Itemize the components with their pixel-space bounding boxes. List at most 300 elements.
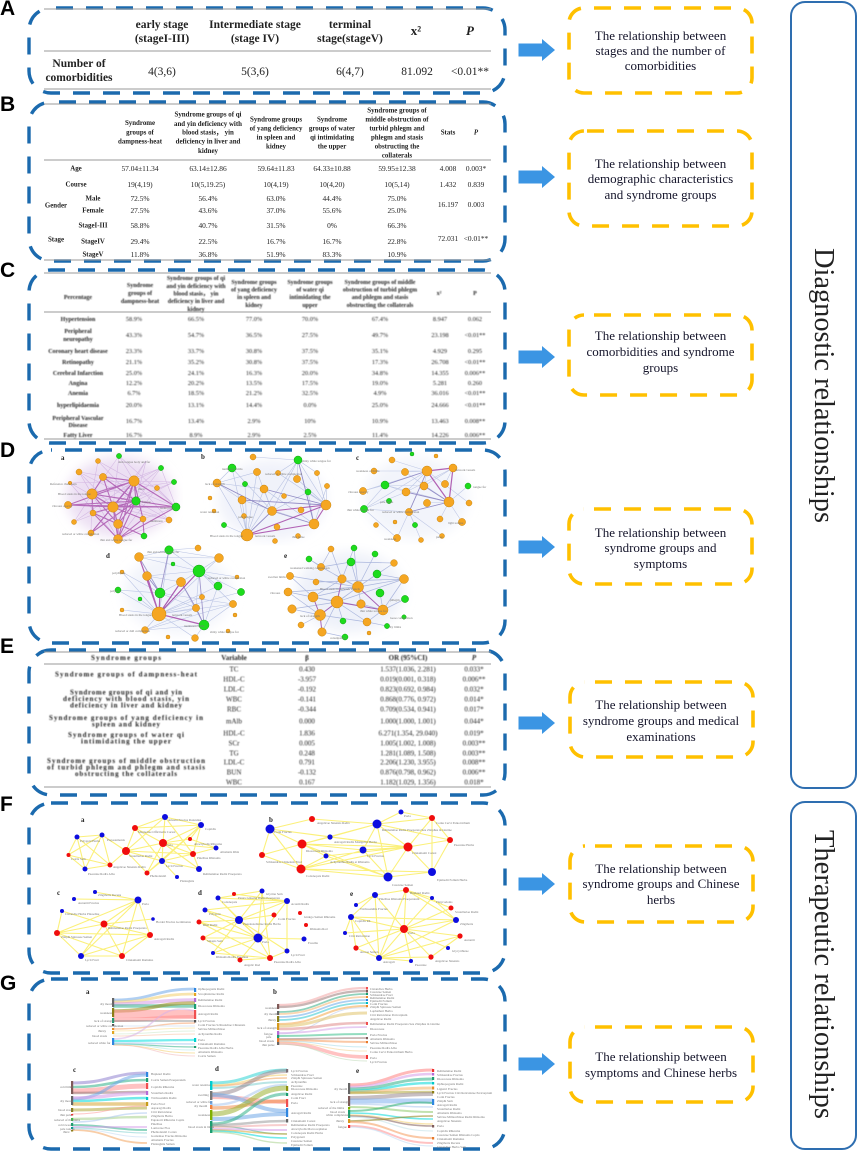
table B header: collaterals [382, 152, 412, 160]
sankey d: Cuscutae Semen [291, 1139, 313, 1143]
table C header: of yang deficiency [231, 288, 277, 294]
callout A: stages and comorbidities [569, 8, 752, 93]
sankey e: fatigue [338, 1125, 347, 1129]
table E values [223, 666, 486, 786]
sankey b: fatigue [264, 1032, 273, 1036]
network c: pulse [436, 535, 443, 539]
network d: Blood stasis in the tongue [119, 613, 153, 617]
table C rows: 14.4% [246, 402, 263, 409]
sankey b: thin pulse [262, 1043, 275, 1047]
arrow C [518, 346, 555, 368]
table A header: x² [411, 23, 421, 38]
table E values: 0.014* [464, 696, 484, 704]
sankey e: Angelicae Sinensis [437, 1119, 462, 1123]
sankey c: reduced of the limbs [54, 1118, 81, 1122]
table E header: Syndrome groups [91, 654, 161, 662]
network c: c [356, 454, 359, 462]
network e [268, 545, 413, 640]
network c: weakness [384, 537, 397, 541]
table E syndrome labels: spleen and kidney [92, 720, 160, 728]
table E header: OR (95%CI) [389, 654, 428, 662]
herb network a: Paeoniae Radix Alba [88, 872, 115, 876]
table C rows: 24.666 [431, 402, 449, 409]
table C header: kidney [187, 307, 205, 313]
herb network e: Glycyrrhizae [452, 949, 469, 953]
table E values: 0.868(0.776, 0.972) [380, 696, 436, 704]
sankey a: Coicis Semen [198, 1054, 216, 1058]
herb network d: Angelic Rad [244, 963, 260, 967]
herb network d: Panax Ginseng Radix Praeparata [238, 896, 280, 900]
herb network e: e [350, 890, 353, 898]
table A row: <0.01** [451, 66, 489, 78]
sankey d: weakness [198, 1113, 211, 1117]
herb network b: Astragali Radix Mongolici Herba [334, 840, 377, 844]
table C rows: 5.281 [433, 380, 447, 387]
sankey a: blood stasis [92, 1034, 108, 1038]
arrow B [518, 166, 555, 188]
table B header: Syndrome groups of [367, 108, 427, 114]
table B header: obstructing the [375, 144, 419, 150]
sankey d: Codonopsis Radix Herba [291, 1131, 324, 1135]
table E values: TC [230, 666, 239, 674]
table A row [45, 58, 489, 84]
network c: pale limbs [380, 500, 394, 504]
network b: lack of strength [205, 482, 225, 486]
sankey c: Scutellaria Radix [151, 1091, 173, 1095]
table B rows: 75.0% [387, 194, 407, 203]
sankey c: Trichosanthis Radix [151, 1096, 177, 1100]
sankey a: Ophiopogonis Radix [198, 987, 225, 991]
table C rows: 58.9% [126, 316, 143, 323]
network c: weakness of limbs [356, 469, 380, 473]
sankey c: Zingiberis Herba [151, 1114, 173, 1118]
sankey e: reduced of the limbs [318, 1106, 345, 1110]
sankey b: weakness [265, 1006, 278, 1010]
sankey e: Astragali Radix [437, 1103, 458, 1107]
table B header: middle obstruction of [365, 116, 429, 124]
table C rows: 2.9% [247, 432, 261, 439]
table B rows: 22.5% [198, 237, 218, 246]
table C rows: 54.7% [188, 332, 205, 339]
table A header: early stage [136, 19, 188, 31]
sankey d: Astragali Radix [291, 1111, 312, 1115]
sankey b: thirsty [268, 1018, 277, 1022]
herb network d: Rhizoma Radix Paeoniae [216, 955, 249, 959]
table E values: 0.019(0.001, 0.318) [380, 676, 436, 684]
table C rows: 4.929 [433, 348, 447, 355]
callout D: syndrome groups and symptoms: symptoms [634, 556, 687, 571]
table C rows: 6.7% [127, 390, 141, 397]
table E values: 0.167 [299, 778, 315, 786]
sankey b: dry mouth [264, 1012, 278, 1016]
network d: thin and white tongue fur [147, 550, 180, 554]
table E values: 0.044* [464, 718, 484, 726]
table B rows: Gender [45, 202, 67, 210]
table C header: obstructing the collaterals [347, 303, 414, 309]
category box: Therapeutic relationships [791, 802, 856, 1149]
table C rows: 0.062 [468, 316, 482, 323]
table E syndrome labels: Syndrome groups of dampness-heat [55, 670, 198, 678]
table A row: 4(3,6) [148, 66, 176, 78]
table E syndrome labels: deficiency with blood stasis, yin [63, 695, 189, 703]
network b: numbness limbs [222, 467, 243, 471]
herb network c: Hordei Fructus Germinatus [156, 920, 192, 924]
table C header: Syndrome groups [231, 280, 277, 286]
herb network a: Polygoni Herba [80, 839, 101, 843]
sankey e: Coptidis Rhizoma [437, 1129, 461, 1133]
table C rows: 30.8% [246, 348, 263, 355]
sankey a [86, 987, 246, 1058]
sankey d [186, 1065, 330, 1147]
table C rows: 12.2% [126, 380, 143, 387]
sankey c: Lonicerae Flos [151, 1126, 171, 1130]
table B rows: 19(4,19) [127, 180, 153, 189]
sankey a: Rehmanniae Radix [198, 998, 223, 1002]
table C rows: 18.5% [188, 390, 205, 397]
network d: shiny white tongue fur [210, 630, 240, 634]
sankey a: reduced white fur [88, 1041, 111, 1045]
callout G: symptoms and Chinese herbs [570, 1027, 753, 1102]
sankey b [257, 987, 440, 1064]
table B header: deficiency in liver and [176, 138, 241, 146]
sankey a: a [86, 988, 90, 996]
table E values: WBC [226, 778, 242, 786]
table B rows: <0.01** [464, 234, 489, 243]
table B rows: 0.003 [468, 200, 485, 209]
sankey d: Atractylodis Macrocephalae [291, 1127, 328, 1131]
callout B: demographics and syndrome groups: The relationship between [595, 156, 727, 171]
panel letter C: C [0, 259, 15, 282]
herb network c: Rehmanniae Radix Praeparata [108, 926, 147, 930]
table B header: Stats [441, 130, 456, 136]
table B rows: Female [82, 208, 104, 214]
sankey e: white complexion [326, 1113, 349, 1117]
table B rows: 0.003* [466, 164, 486, 173]
table C rows: Disease [68, 423, 88, 429]
herb network a: Coptidis [205, 827, 217, 831]
table B header: P [474, 130, 479, 136]
herb network b [259, 810, 475, 887]
table B rows: 64.33±10.88 [313, 164, 351, 173]
table E syndrome labels: Syndrome groups of water qi [68, 731, 184, 739]
sankey b: b [273, 988, 277, 996]
herb network d: Lycii Fruct [291, 953, 305, 957]
table B rows: 72.031 [438, 234, 458, 243]
network b: shiny white tongue fur [302, 459, 332, 463]
arrow A [518, 39, 555, 61]
sankey c: c [73, 1066, 76, 1074]
table C rows: 13.5% [246, 380, 263, 387]
table E values: 0.248 [299, 750, 315, 758]
table C rows: 20.0% [302, 370, 319, 377]
table C rows: 36.5% [246, 332, 263, 339]
table C rows: <0.01** [465, 359, 485, 366]
table C rows: 10.9% [372, 418, 389, 425]
sankey b: lack of strength [257, 1026, 277, 1030]
arrow G [518, 1053, 555, 1075]
callout B: demographics and syndrome groups [569, 131, 752, 226]
callout F: syndrome groups and Chinese herbs: syndrome groups and Chinese [582, 876, 740, 891]
table B rows: 43.6% [198, 206, 218, 215]
herb network e: Aurantii [464, 938, 475, 942]
sankey d: d [215, 1065, 219, 1073]
table B rows: 55.6% [322, 206, 342, 215]
table C rows: 37.5% [302, 359, 319, 366]
table B header: Syndrome groups of qi [175, 112, 242, 118]
table B header: and yin deficiency with [174, 121, 242, 128]
herb network e: Scutellariae Radix [455, 910, 479, 914]
table B rows: 27.5% [130, 206, 150, 215]
sankey c: Phellodendri Cortex [151, 1130, 177, 1134]
sankey d: Cinnamomi Cortex [291, 1119, 316, 1123]
callout C: comorbidities and syndrome groups: groups [643, 360, 678, 375]
table E values: mAlb [226, 718, 242, 726]
table E syndrome labels: deficiency in liver and kidney [70, 702, 182, 710]
table C header: obstruction of turbid phlegm [343, 288, 417, 294]
herb network c: c [57, 889, 60, 897]
sankey a: Dioscoreae Rhizoma [198, 1004, 225, 1008]
table C rows: 17.5% [302, 380, 319, 387]
table C rows: <0.01** [465, 402, 485, 409]
table E values: BUN [227, 768, 241, 776]
herb network c [54, 889, 192, 962]
sankey a: Salviae Miltiorrhizae [198, 1027, 226, 1031]
herb network e [343, 887, 479, 967]
callout C: comorbidities and syndrome groups: comorbidities and syndrome [586, 344, 735, 359]
table C rows: 37.5% [302, 348, 319, 355]
table C rows: 4.9% [373, 390, 387, 397]
table E values: 0.017* [464, 706, 484, 714]
panel letter F: F [0, 793, 13, 816]
herb network d: Pseudostellariae Radix Herba [243, 922, 281, 926]
sankey a: Scrophulariae Radix [198, 992, 225, 996]
herb network b: Cinnamomi Cortex [412, 851, 437, 855]
table C rows: 49.7% [372, 332, 389, 339]
table C header [64, 276, 477, 313]
sankey e: Scutellariae Radix [437, 1107, 461, 1111]
table E values: 0.430 [299, 666, 315, 674]
panel letter B: B [0, 93, 15, 116]
sankey e: Cinnamomi Ramulus [437, 1137, 465, 1141]
table A header: (stageI-III) [135, 33, 189, 45]
sankey b: Cornu Cervi Pantotrichum Herba [370, 1050, 413, 1054]
table E values: WBC [226, 696, 242, 704]
table B rows: 37.0% [266, 206, 286, 215]
table B rows: 63.14±12.86 [189, 164, 227, 173]
table C rows: 33.7% [188, 348, 205, 355]
herb network d: Rhizoma Rad [310, 927, 328, 931]
table C rows: Coronary heart disease [48, 349, 108, 355]
sankey e: Rehmanniae Radix [437, 1069, 462, 1073]
table B rows: 29.4% [130, 237, 150, 246]
table B header: qi intimidating [310, 134, 354, 142]
table C rows: Anemia [68, 391, 88, 397]
network b [200, 453, 332, 544]
sankey c: Gardeniae Fructus Rhizoma [151, 1134, 187, 1138]
sankey a: Astragali Radix [198, 1012, 219, 1016]
callout D: syndrome groups and symptoms: The relationship between [595, 525, 727, 540]
herb network a: Rehmanniae Radix Praeparata [203, 872, 242, 876]
sankey d: Corni Fruct [291, 1096, 306, 1100]
sankey a: Poria [198, 1038, 205, 1042]
table C rows: 16.3% [246, 370, 263, 377]
table E values: 1.000(1.000, 1.001) [380, 718, 436, 726]
table C header: P [473, 291, 477, 297]
table C rows: 13.463 [431, 418, 449, 425]
table E values: 6.271(1.354, 29.040) [379, 730, 438, 738]
herb network a: Poria [166, 843, 173, 847]
sankey c: Alismatis Fructus [151, 1138, 174, 1142]
herb network e: Poria [408, 931, 415, 935]
herb network a: Lycii Fructus [166, 864, 184, 868]
network e: phlegm [390, 598, 400, 602]
table E syndrome labels: Syndrome groups of middle obstruction [47, 757, 205, 765]
table B header: the upper [318, 144, 346, 150]
callout B: demographics and syndrome groups: and syndrome groups [605, 187, 716, 202]
sankey e: blood stasis [330, 1110, 346, 1114]
panel A: stages and comorbidities table [29, 8, 505, 93]
network a: numbness [150, 519, 164, 523]
callout F: syndrome groups and Chinese herbs [570, 846, 753, 922]
table E header: β [305, 654, 309, 662]
network c: light tongue [448, 521, 464, 525]
table E values: TG [229, 750, 239, 758]
herb network b: Cornu Cervi Pantotrichum [436, 821, 470, 825]
herb network c: Zingiberis Recens [98, 893, 122, 897]
table C rows: 34.8% [372, 370, 389, 377]
callout F: syndrome groups and Chinese herbs: The relationship between [595, 861, 727, 876]
herb network a: Plantaginis [180, 879, 195, 883]
sankey d: Angelicae Radix [291, 1092, 313, 1096]
table C rows: 8.9% [189, 432, 203, 439]
network c: vitreous opacity [348, 490, 369, 494]
table A header: stage(stageV) [317, 33, 383, 45]
sankey a: Paeoniae Radix Alba Herba [198, 1046, 234, 1050]
category box: Diagnostic relationships: Diagnostic relationships [808, 248, 840, 523]
table B rows: 58.8% [130, 221, 150, 230]
herb network d: Codonopsis [222, 900, 238, 904]
herb network b: b [269, 816, 273, 824]
table A row: 5(3,6) [241, 66, 269, 78]
herb network d: Aconiti Radix [291, 902, 309, 906]
herb network d: Fossilia [308, 941, 319, 945]
sankey e: Salviae Miltiorrhizae Radix Rhizoma [437, 1115, 485, 1119]
table E syndrome labels [47, 670, 205, 778]
table E values: 0.005 [299, 740, 315, 748]
sankey d: Epimedii Folium [291, 1143, 313, 1147]
table C header: groups of [128, 291, 153, 297]
network d: network vessels [172, 613, 193, 617]
table B header: blood stasis， yin [182, 130, 234, 136]
category box: Therapeutic relationships: Therapeutic relationships [808, 830, 840, 1119]
sankey d: Rehmanniae Radix Praeparata [291, 1123, 330, 1127]
sankey d: Ziziphi Spinosae Semen [291, 1076, 322, 1080]
network d: polydipsia [112, 571, 126, 575]
network e: weakened walking complexion [290, 566, 330, 570]
table E values: -3.957 [298, 676, 317, 684]
table B header: Syndrome [125, 120, 155, 127]
table B header: groups of water [309, 126, 355, 132]
table B rows: 40.7% [198, 221, 218, 230]
table E header [91, 654, 477, 662]
network e: lack of strength [300, 614, 320, 618]
table C rows: 43.3% [126, 332, 143, 339]
table C rows: 17.3% [372, 359, 389, 366]
network b: thin pulse [292, 535, 305, 539]
sankey a: Alismatis Rhizoma [198, 1050, 223, 1054]
herb network c: Poria [142, 902, 149, 906]
network a: thirst [138, 487, 145, 491]
table E values: 1.537(1.036, 2.281) [380, 666, 436, 674]
table B rows: 25.0% [387, 206, 407, 215]
table E values: 2.206(1.230, 3.955) [380, 758, 436, 766]
table C header: dampness-heat [121, 299, 159, 305]
herb network b: Cuscutae Semen [392, 883, 414, 887]
sankey d: reduced or white fur [186, 1100, 213, 1104]
herb network d: Glycine Sem [266, 892, 283, 896]
herb network e: Citri Reticulatae [349, 934, 371, 938]
sankey a: thirsty [98, 1029, 107, 1033]
table B header: Syndrome [317, 116, 347, 124]
table C header: and phlegm and stasis [352, 295, 409, 301]
sankey c: dry mouth [60, 1099, 74, 1103]
callout D: syndrome groups and symptoms [569, 509, 752, 584]
table E values: 0.823(0.692, 0.984) [380, 686, 436, 694]
panel letter G: G [0, 972, 16, 995]
callout G: symptoms and Chinese herbs: symptoms and Chinese herbs [585, 1065, 737, 1080]
herb network a: Alismatis Rhiz [220, 850, 240, 854]
sankey b: Poria Fructus [370, 1033, 388, 1037]
table C rows: 16.7% [126, 432, 143, 439]
table E values: 1.182(1.029, 1.356) [380, 778, 436, 786]
table E syndrome labels: Syndrome groups of yang deficiency in [49, 714, 203, 722]
table E values: LDL-C [224, 686, 245, 694]
table C rows: Peripheral [64, 329, 92, 335]
herb network b: Dioscoreae Rhizoma [306, 849, 333, 853]
sankey d: blood stasis in limbs [188, 1125, 215, 1129]
sankey c: Coicis Semen Praeparatum [151, 1078, 186, 1082]
network a: fatigue [142, 500, 151, 504]
table E values: 0.791 [299, 758, 315, 766]
herb network c: Aurantii Fructus [78, 901, 100, 905]
table A row: 81.092 [401, 66, 433, 78]
arrow D [518, 536, 555, 558]
network b: water retention [200, 510, 220, 514]
table C header: Syndrome [127, 283, 153, 289]
table C rows: Cerebral Infarction [53, 371, 104, 377]
table E values: 0.000 [299, 718, 315, 726]
herb network c: Cinnamomi Ramulus [126, 958, 154, 962]
table C rows: 25.0% [372, 402, 389, 409]
network c: thin white tongue fur [347, 508, 375, 512]
table C header: in spleen and [237, 295, 271, 301]
sankey c: Citri Reticulatae [151, 1110, 173, 1114]
table E values: -0.192 [298, 686, 317, 694]
sankey e: e [356, 1067, 359, 1075]
network c: reduced or white complexion [382, 510, 420, 514]
herb network e: Zingiberis [460, 922, 474, 926]
table C header: upper [302, 303, 318, 309]
sankey a: Corni Fructus Schisandrae Chinensis [198, 1023, 246, 1027]
table A header [135, 19, 475, 45]
table C rows: hyperlipidaemia [57, 403, 99, 409]
sankey b: Lophatheri Herba [370, 1009, 393, 1013]
sankey d: Schisandrae Fruct [291, 1073, 314, 1077]
table C rows: 11.4% [372, 432, 389, 439]
table B rows: 56.4% [198, 194, 218, 203]
table C rows: 13.1% [188, 402, 205, 409]
table C rows: Fatty Liver [63, 433, 93, 439]
